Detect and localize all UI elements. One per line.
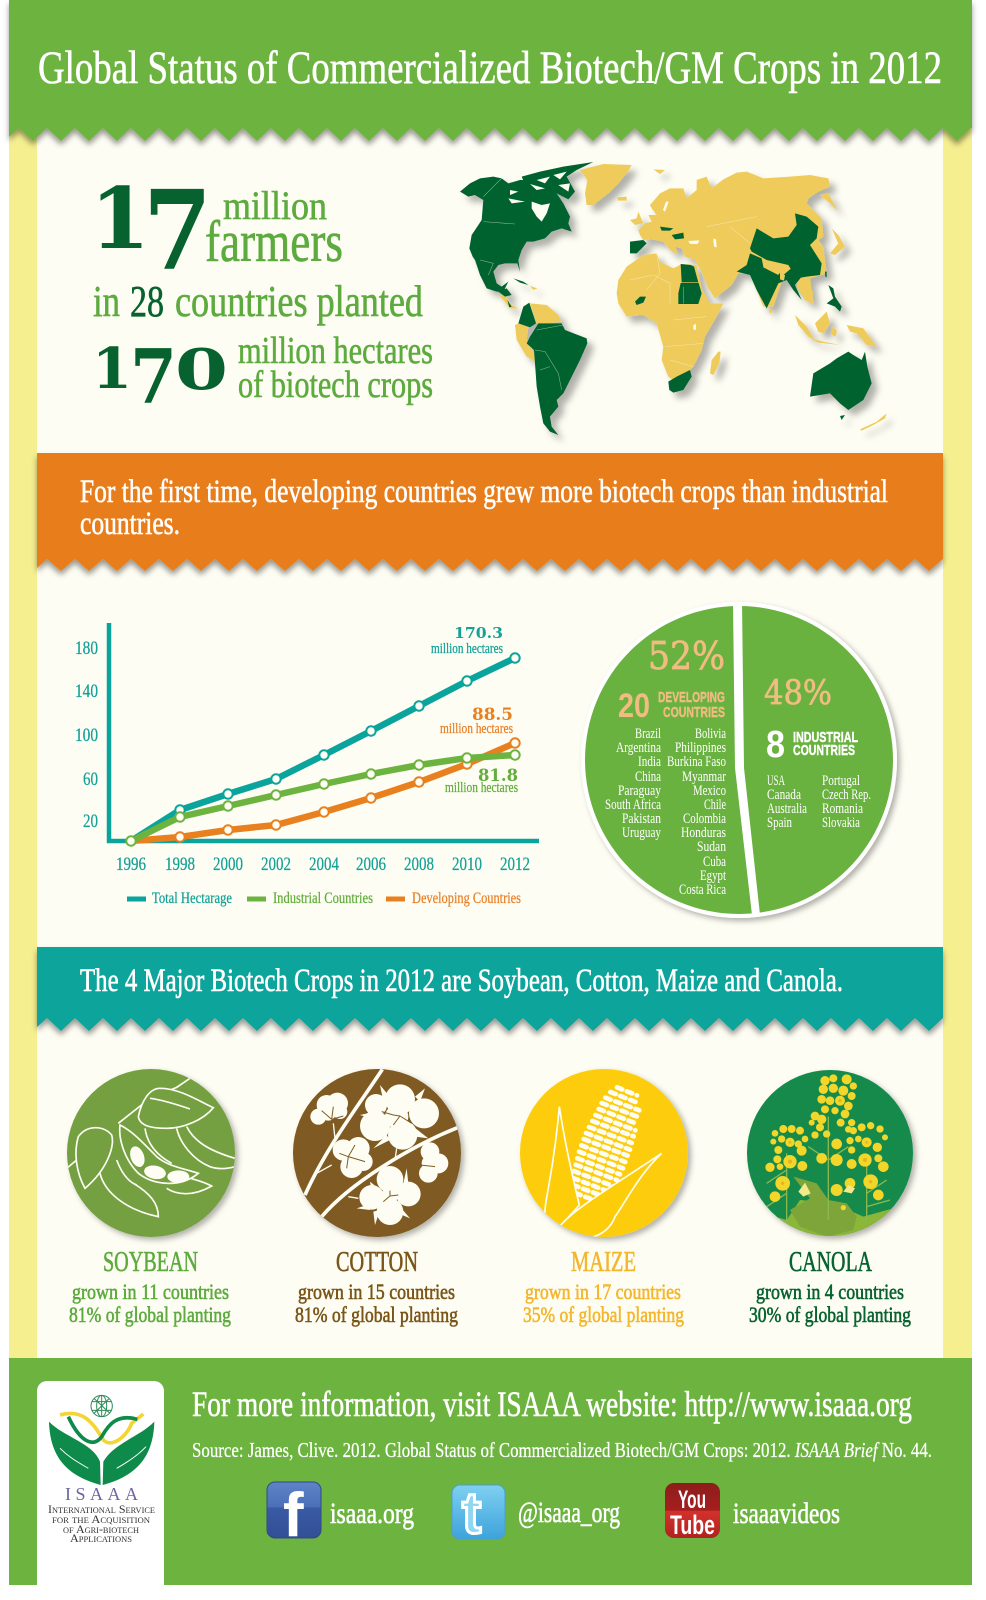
- list: developing countries: South Africa: [605, 797, 661, 813]
- crop label: soybean: [69, 1246, 231, 1327]
- chart legend: [127, 890, 521, 907]
- callout: industrial 81.8: 81.8: [478, 766, 518, 786]
- header banner: [9, 0, 972, 141]
- list: developing countries: Brazil: [635, 726, 661, 742]
- pie label: industrial 48%: 48%: [764, 673, 832, 713]
- stat: 170 million hectares of biotech crops: 1: [92, 336, 132, 402]
- icon: cotton: [293, 1069, 461, 1237]
- list: developing countries: Mexico: [693, 783, 726, 799]
- stat: 170 million hectares of biotech crops: 0: [175, 337, 228, 403]
- crop label: cotton: COTTON: [336, 1246, 418, 1278]
- callout: developing 88.5: [440, 705, 513, 737]
- list: developing countries: Paraguay: [618, 783, 662, 799]
- callout: developing 88.5: million hectares: [440, 721, 513, 737]
- line chart: hectarage 1996-2012: [75, 623, 539, 907]
- stat: 170 million hectares of biotech crops: of biotech crops: [238, 364, 433, 406]
- social: youtube: Tube: [670, 1510, 715, 1540]
- crop label: cotton: [295, 1246, 458, 1327]
- logo mark: [49, 1395, 154, 1485]
- stat: in 28 countries planted: countries planted: [175, 277, 423, 326]
- x axis labels: 1996: [116, 854, 146, 875]
- list: developing countries: Bolivia: [695, 726, 726, 742]
- x axis labels: 2010: [452, 854, 482, 875]
- list: industrial countries: Portugal: [822, 773, 860, 789]
- list: developing countries: Cuba: [703, 854, 726, 870]
- pie label: developing 52%: 52%: [648, 634, 725, 678]
- footer panel: [9, 1358, 972, 1585]
- series: total hectarage: [131, 653, 520, 841]
- list: developing countries: Myanmar: [682, 769, 726, 785]
- list: industrial countries: Canada: [767, 787, 801, 803]
- list: industrial countries: Czech Rep.: [822, 787, 871, 803]
- x axis labels: 2008: [404, 854, 434, 875]
- list: industrial countries: Slovakia: [822, 815, 860, 831]
- social: twitter: [452, 1481, 620, 1546]
- banner text: developing countries: [80, 474, 888, 542]
- crop label: maize: 35% of global planting: [523, 1302, 684, 1327]
- callout: total 170.3: million hectares: [431, 641, 503, 657]
- crop label: maize: [523, 1246, 684, 1327]
- y axis labels: 20: [83, 811, 98, 832]
- y axis labels: [75, 638, 98, 832]
- social: facebook: f: [283, 1481, 304, 1550]
- crop label: cotton: grown in 15 countries: [298, 1279, 455, 1304]
- chart legend: Total Hectarage: [152, 890, 232, 907]
- icon: soybean: [67, 1069, 235, 1237]
- crop label: canola: [749, 1246, 911, 1327]
- stat block: farmers, countries, hectares: [90, 166, 433, 421]
- social: youtube: [665, 1483, 840, 1540]
- callout: industrial 81.8: million hectares: [445, 780, 518, 796]
- stat: in 28 countries planted: [93, 277, 423, 326]
- icon: canola: [747, 1070, 913, 1240]
- crop label: maize: MAIZE: [571, 1246, 636, 1278]
- callout: total 170.3: 170.3: [454, 624, 503, 642]
- pie chart: developing vs industrial: [581, 602, 897, 918]
- list: industrial countries: Spain: [767, 815, 793, 831]
- pie label: industrial 48%: 8: [766, 724, 785, 766]
- y axis labels: 60: [83, 769, 98, 790]
- list: developing countries: Costa Rica: [679, 882, 726, 898]
- list: developing countries: Honduras: [681, 825, 726, 841]
- stat: 170 million hectares of biotech crops: million hectares: [238, 330, 433, 372]
- pie label: developing 52%: COUNTRIES: [663, 704, 725, 721]
- list: industrial countries: Romania: [822, 801, 863, 817]
- list: developing countries: Chile: [704, 797, 726, 813]
- crop label: canola: CANOLA: [789, 1246, 872, 1278]
- list: developing countries: Philippines: [675, 740, 726, 756]
- banner: developing countries: [37, 453, 943, 571]
- crop label: soybean: 81% of global planting: [69, 1302, 231, 1327]
- yellow land: [498, 164, 887, 431]
- chart legend: Industrial Countries: [273, 890, 373, 907]
- callout: developing 88.5: 88.5: [472, 705, 513, 725]
- x axis labels: [116, 854, 530, 875]
- stat: in 28 countries planted: 28: [130, 277, 164, 326]
- series: developing countries: [131, 738, 520, 842]
- list: developing countries: Pakistan: [622, 811, 662, 827]
- crop label: canola: 30% of global planting: [749, 1302, 911, 1327]
- x axis labels: 2000: [213, 854, 243, 875]
- logo wordmark: ISAAA: [65, 1484, 138, 1504]
- x axis labels: 2006: [356, 854, 386, 875]
- y axis labels: 180: [75, 638, 98, 659]
- chart legend: Developing Countries: [412, 890, 521, 907]
- footer: source line: Source: James, Clive. 2012. Global Status of Commercialized Biotech/GM Crops: 2012. ISAAA Brief No. 44.: [192, 1438, 932, 1462]
- dark biotech-growing land: [460, 162, 872, 435]
- series: industrial countries: [126, 750, 520, 846]
- list: developing countries: Uruguay: [622, 825, 662, 841]
- x axis labels: 1998: [165, 854, 195, 875]
- stat: 17 million farmers: farmers: [205, 209, 343, 274]
- icon: maize: [520, 1069, 688, 1247]
- logo wordmark: International Service: [48, 1504, 155, 1516]
- stat: 17 million farmers: [90, 166, 343, 295]
- social: youtube: You: [678, 1486, 706, 1514]
- list: developing countries: China: [635, 769, 661, 785]
- pie label: industrial 48%: [764, 673, 858, 766]
- social: twitter: @isaaa_org: [518, 1496, 620, 1529]
- stat: 17 million farmers: million: [223, 183, 327, 228]
- pie label: developing 52%: 20: [618, 687, 650, 725]
- crop label: maize: grown in 17 countries: [525, 1279, 681, 1304]
- logo wordmark: Applications: [70, 1533, 132, 1545]
- stat: 170 million hectares of biotech crops: 7: [130, 333, 177, 421]
- stat: 170 million hectares of biotech crops: [92, 330, 433, 421]
- stat: in 28 countries planted: in: [93, 277, 120, 326]
- list: industrial countries: USA: [767, 773, 785, 789]
- yellow patches and cut-outs over land: [480, 172, 813, 390]
- y axis labels: 100: [75, 725, 98, 746]
- list: industrial countries: [767, 773, 871, 831]
- list: developing countries: Burkina Faso: [667, 754, 726, 770]
- stat: 17 million farmers: 7: [143, 166, 212, 295]
- page background: side strips and cream panel: [9, 120, 972, 1360]
- banner text: developing countries: countries.: [80, 506, 180, 542]
- ISAAA logo card: [37, 1381, 164, 1600]
- list: developing countries: Egypt: [700, 868, 726, 884]
- list: developing countries: Colombia: [683, 811, 726, 827]
- world map: [460, 162, 887, 435]
- crop label: cotton: 81% of global planting: [295, 1302, 458, 1327]
- x axis labels: 2004: [309, 854, 339, 875]
- pie label: industrial 48%: COUNTRIES: [793, 742, 855, 759]
- callout: industrial 81.8: [445, 766, 518, 796]
- x axis labels: 2002: [261, 854, 291, 875]
- pie label: industrial 48%: INDUSTRIAL: [793, 729, 858, 746]
- social: twitter: t: [462, 1481, 481, 1546]
- chart axes: [107, 623, 539, 843]
- x axis labels: 2012: [500, 854, 530, 875]
- list: developing countries: India: [638, 754, 661, 770]
- crop label: canola: grown in 4 countries: [756, 1279, 904, 1304]
- list: developing countries: [605, 726, 727, 898]
- social: youtube: isaaavideos: [733, 1497, 840, 1530]
- crop label: soybean: grown in 11 countries: [72, 1279, 229, 1304]
- stat: 17 million farmers: 1: [90, 169, 150, 268]
- list: developing countries: Sudan: [697, 839, 727, 855]
- logo wordmark: for the Acquisition: [52, 1514, 150, 1526]
- logo wordmark: [48, 1484, 155, 1545]
- callout: total 170.3: [431, 624, 503, 657]
- pie label: developing 52%: [618, 634, 725, 725]
- logo wordmark: of Agri-biotech: [63, 1524, 139, 1536]
- list: developing countries: Argentina: [616, 740, 661, 756]
- list: industrial countries: Australia: [767, 801, 807, 817]
- social: facebook: isaaa.org: [330, 1497, 414, 1530]
- pie label: developing 52%: DEVELOPING: [658, 689, 725, 706]
- social: facebook: [267, 1481, 414, 1550]
- banner: major crops: [37, 947, 943, 1031]
- y axis labels: 140: [75, 681, 98, 702]
- crop label: soybean: SOYBEAN: [103, 1246, 198, 1278]
